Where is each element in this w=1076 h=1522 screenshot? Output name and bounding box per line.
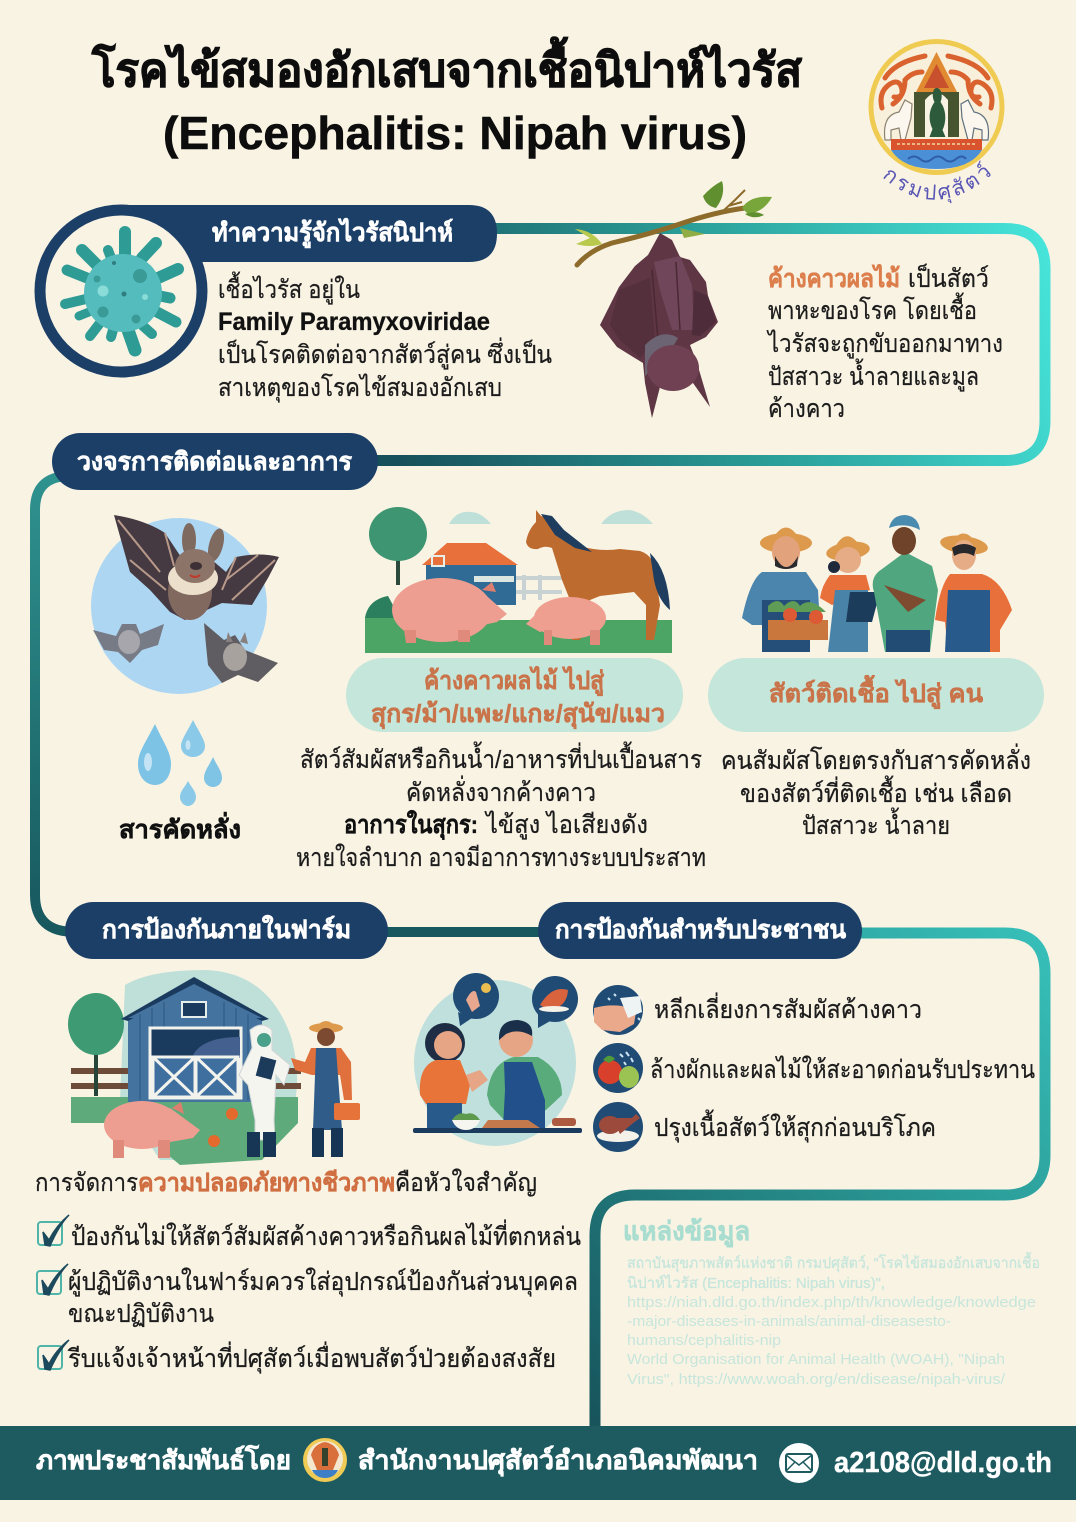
text block: animal infection and pig symptoms: อาการในสุกร:: [344, 809, 478, 841]
text block: animal infection and pig symptoms: [296, 741, 706, 872]
heading pill: prevention on farm: การป้องกันภายในฟาร์ม: [102, 914, 351, 944]
icon: department of livestock emblem: [868, 39, 1004, 204]
icon: email: [779, 1443, 819, 1483]
text: office name: สำนักงานปศุสัตว์อำเภอนิคมพัฒนา: [358, 1445, 758, 1477]
text block: biosecurity: คือหัวใจสำคัญ: [395, 1168, 537, 1197]
icon: cooked meat: [593, 1102, 643, 1152]
text block: human infection: [721, 743, 1031, 840]
heading pill: prevention on farm: [65, 902, 388, 959]
illustration: flying bats: [91, 515, 279, 694]
checklist: farm prevention: [37, 1215, 581, 1374]
check item 2: ผู้ปฏิบัติงานในฟาร์มควรใส่อุปกรณ์ป้องกันส่วนบุคคล: [68, 1267, 578, 1297]
text block: fruit bat description: เป็นสัตว์: [908, 263, 989, 293]
text block: fruit bat description: ปัสสาวะ น้ำลายและมูล: [768, 358, 979, 392]
text block: biosecurity: [35, 1168, 537, 1197]
check item 1: ป้องกันไม่ให้สัตว์สัมผัสค้างคาวหรือกินผลไม้ที่ตกหล่น: [71, 1219, 581, 1251]
heading pill: prevention for public: [538, 902, 862, 959]
title: [91, 36, 803, 159]
text block: animal infection and pig symptoms: ไข้สูง ไอเสียงดัง: [484, 810, 648, 840]
text block: virus description: Family Paramyxoviridae: [218, 308, 490, 336]
label pill: bat to animals: สุกร/ม้า/แพะ/แกะ/สุนัข/แมว: [371, 700, 665, 730]
text block: fruit bat description: พาหะของโรค โดยเชื้อ: [768, 292, 977, 325]
label pill: bat to animals: [346, 658, 683, 732]
illustration: fruit bat hanging from branch: [575, 181, 772, 418]
text block: fruit bat description: ค้างคาวผลไม้: [768, 263, 900, 293]
label pill: bat to animals: ค้างคาวผลไม้ ไปสู่: [424, 665, 605, 697]
connector: left frame: [35, 476, 560, 932]
text: publicity by: ภาพประชาสัมพันธ์โดย: [36, 1444, 291, 1475]
source list: นิปาห์ไวรัส (Encephalitis: Nipah virus)",: [627, 1274, 885, 1292]
title: โรคไข้สมองอักเสบจากเชื้อนิปาห์ไวรัส: [91, 36, 803, 96]
text block: human infection: คนสัมผัสโดยตรงกับสารคัดหลั่ง: [721, 743, 1031, 775]
text block: human infection: ของสัตว์ที่ติดเชื้อ เช่น เลือด: [740, 775, 1012, 808]
text block: virus description: [218, 271, 552, 403]
source list: World Organisation for Animal Health (WOAH), "Nipah: [627, 1351, 1005, 1368]
source list: [627, 1252, 1040, 1388]
text block: fruit bat description: ไวรัสจะถูกขับออกมาทาง: [766, 329, 1003, 359]
title: (Encephalitis: Nipah virus): [163, 107, 747, 159]
illustration: farm biosecurity scene: [68, 970, 360, 1165]
icon: department of livestock emblem: กรมปศุสัตว์: [883, 160, 991, 204]
icon: wash fruit and vegetables: [593, 1043, 643, 1093]
text block: animal infection and pig symptoms: หายใจลำบาก อาจมีอาการทางระบบประสาท: [296, 843, 706, 872]
text block: biosecurity: การจัดการ: [35, 1169, 138, 1197]
heading pill: prevention for public: การป้องกันสำหรับประชาชน: [555, 916, 846, 944]
source list: -major-diseases-in-animals/animal-diseasesto-: [627, 1313, 951, 1330]
check item 2: ขณะปฏิบัติงาน: [68, 1300, 214, 1328]
text block: animal infection and pig symptoms: คัดหลั่งจากค้างคาว: [406, 775, 596, 807]
label pill: animal to human: [708, 658, 1044, 732]
icon: virus: [40, 210, 202, 372]
text block: human infection: ปัสสาวะ น้ำลาย: [802, 807, 950, 840]
label: secretions: สารคัดหลั่ง: [119, 812, 241, 844]
icon: secretion droplets: [138, 720, 222, 806]
connector: lower right frame: [595, 933, 1045, 1430]
panel: references: [623, 1216, 1040, 1388]
text block: virus description: เชื้อไวรัส อยู่ใน: [218, 271, 360, 305]
text block: fruit bat description: [766, 263, 1003, 423]
footer bar: [0, 1426, 1076, 1500]
text block: virus description: เป็นโรคติดต่อจากสัตว์สู่คน ซึ่งเป็น: [218, 337, 552, 370]
illustration: farm animals: [365, 507, 672, 653]
heading pill: transmission cycle and symptoms: [52, 433, 378, 490]
icon: avoid bats hand washing: [593, 985, 643, 1035]
check item 2: [37, 1264, 578, 1328]
heading: sources: แหล่งข้อมูล: [623, 1216, 750, 1248]
text block: animal infection and pig symptoms: สัตว์สัมผัสหรือกินน้ำ/อาหารที่ปนเปื้อนสาร: [300, 741, 702, 774]
text: email address: a2108@dld.go.th: [834, 1447, 1052, 1479]
heading pill: about Nipah virus: ทำความรู้จักไวรัสนิปาห์: [212, 217, 453, 249]
source list: https://niah.dld.go.th/index.php/th/knowledge/knowledge: [627, 1294, 1036, 1311]
source list: Virus", https://www.woah.org/en/disease/nipah-virus/: [627, 1371, 1006, 1388]
text block: fruit bat description: ค้างคาว: [768, 395, 845, 423]
panel: about the virus: [40, 205, 552, 403]
icon: small emblem: [303, 1438, 347, 1482]
check item 3: รีบแจ้งเจ้าหน้าที่ปศุสัตว์เมื่อพบสัตว์ป่วยต้องสงสัย: [67, 1341, 556, 1374]
check item 1: [38, 1215, 581, 1251]
connector: top frame: [360, 228, 1045, 460]
heading pill: transmission cycle and symptoms: วงจรการติดต่อและอาการ: [77, 448, 353, 476]
label pill: animal to human: สัตว์ติดเชื้อ ไปสู่ คน: [769, 674, 983, 710]
source list: humans/cephalitis-nip: [627, 1332, 781, 1349]
source list: สถาบันสุขภาพสัตว์แห่งชาติ กรมปศุสัตว์, "โรคไข้สมองอักเสบจากเชื้อ: [627, 1252, 1040, 1273]
heading pill: about Nipah virus: [118, 205, 497, 262]
text: cook meat: ปรุงเนื้อสัตว์ให้สุกก่อนบริโภค: [654, 1109, 936, 1143]
text block: biosecurity: ความปลอดภัยทางชีวภาพ: [138, 1169, 395, 1197]
text block: virus description: สาเหตุของโรคไข้สมองอักเสบ: [218, 373, 502, 403]
illustration: farmers: [742, 515, 1012, 652]
text: avoid bat contact: หลีกเลี่ยงการสัมผัสค้างคาว: [654, 992, 922, 1024]
illustration: cooking scene: [413, 973, 582, 1146]
